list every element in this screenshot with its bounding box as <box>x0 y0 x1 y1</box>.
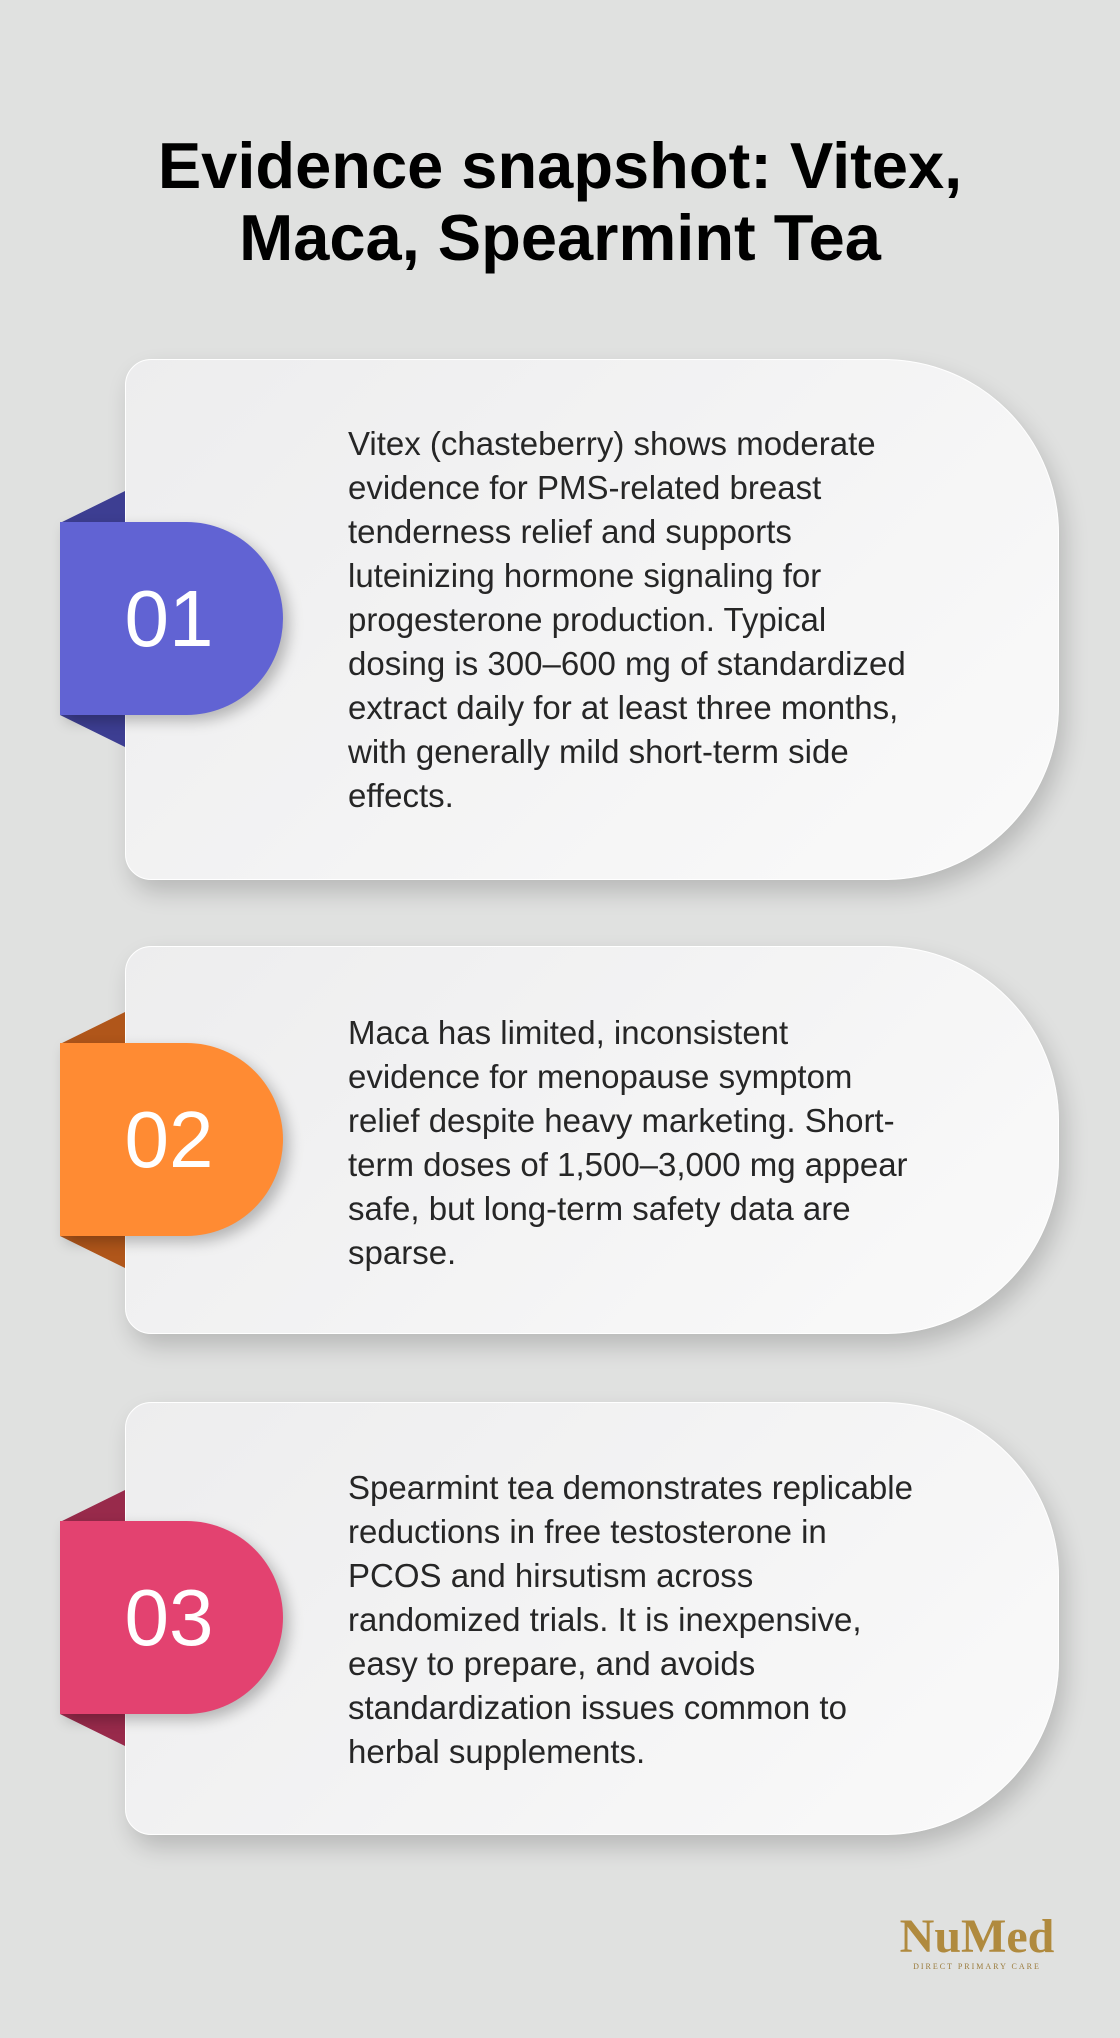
fold bottom 3 <box>60 1714 125 1746</box>
fold top 1 <box>62 491 125 522</box>
text 2 <box>348 1014 908 1271</box>
badge 2 <box>59 1012 296 1268</box>
text 1: dosing is 300–600 mg of standardized <box>348 645 906 682</box>
text 3: easy to prepare, and avoids <box>348 1645 755 1682</box>
text 2: evidence for menopause symptom <box>348 1058 852 1095</box>
text 3: Spearmint tea demonstrates replicable <box>348 1469 913 1506</box>
title <box>158 129 962 274</box>
text 3: randomized trials. It is inexpensive, <box>348 1601 862 1638</box>
logo: NuMed <box>900 1910 1054 1963</box>
number 02: 02 <box>124 1095 213 1184</box>
logo: DIRECT PRIMARY CARE <box>913 1962 1041 1971</box>
text 3: PCOS and hirsutism across <box>348 1557 753 1594</box>
text 1: Vitex (chasteberry) shows moderate <box>348 425 876 462</box>
text 1: extract daily for at least three months, <box>348 689 898 726</box>
text 1: with generally mild short-term side <box>348 733 849 770</box>
fold bottom 1 <box>60 715 125 747</box>
text 3: reductions in free testosterone in <box>348 1513 827 1550</box>
number 01: 01 <box>124 574 213 663</box>
text 1: progesterone production. Typical <box>348 601 826 638</box>
badge 1 <box>59 491 296 747</box>
text 2: Maca has limited, inconsistent <box>348 1014 788 1051</box>
text 1: tenderness relief and supports <box>348 513 792 550</box>
fold top 2 <box>62 1012 125 1043</box>
text 2: term doses of 1,500–3,000 mg appear <box>348 1146 908 1183</box>
text 1: evidence for PMS-related breast <box>348 469 821 506</box>
badge 3 <box>59 1490 296 1746</box>
text 1 <box>348 425 906 814</box>
title: Maca, Spearmint Tea <box>239 201 881 274</box>
fold bottom 2 <box>60 1236 125 1268</box>
text 2: sparse. <box>348 1234 456 1271</box>
text 1: effects. <box>348 777 454 814</box>
card 1 <box>125 359 1059 880</box>
text 3: standardization issues common to <box>348 1689 847 1726</box>
text 3 <box>348 1469 913 1770</box>
card 2 <box>125 946 1059 1334</box>
text 3: herbal supplements. <box>348 1733 645 1770</box>
text 1: luteinizing hormone signaling for <box>348 557 821 594</box>
text 2: safe, but long-term safety data are <box>348 1190 851 1227</box>
fold top 3 <box>62 1490 125 1521</box>
number 03: 03 <box>124 1573 213 1662</box>
title: Evidence snapshot: Vitex, <box>158 129 962 202</box>
card 3 <box>125 1402 1059 1835</box>
text 2: relief despite heavy marketing. Short- <box>348 1102 895 1139</box>
